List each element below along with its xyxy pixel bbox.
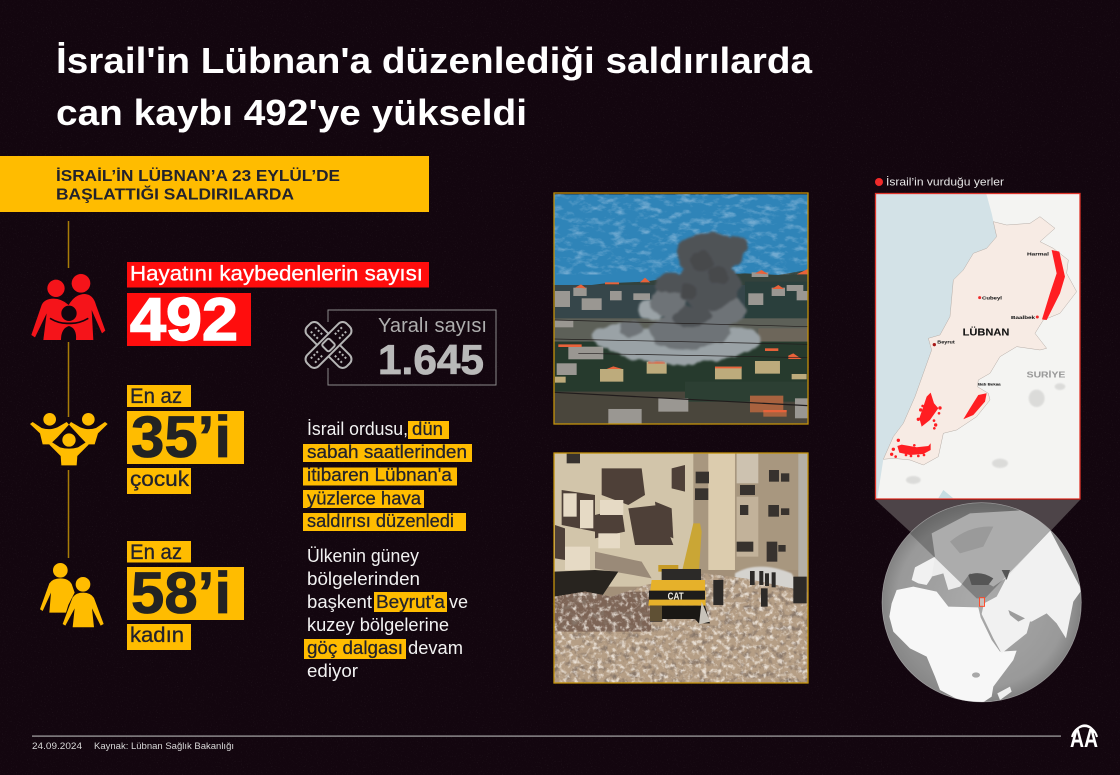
place labels: Baalbek (1011, 315, 1036, 320)
text block: migration: ediyor (307, 661, 358, 681)
place labels: Batı Bekaa (978, 383, 1002, 387)
stat: children: çocuk (130, 468, 190, 491)
photo: rubble and excavator (554, 453, 808, 685)
stat: children (127, 385, 244, 494)
place labels: Beyrut (937, 340, 955, 345)
stat: women: kadın (130, 624, 184, 647)
Iberia and France (912, 557, 935, 585)
timeline connector (68, 221, 70, 558)
strikes: Hermel (1042, 250, 1065, 320)
text block: army statement: sabah saatlerinden (307, 442, 467, 462)
place labels: LÜBNAN (963, 327, 1009, 338)
panel: wounded (289, 305, 496, 385)
footer: date and source (32, 741, 234, 752)
icon: yellow women (40, 563, 104, 627)
footer: date and source: 24.09.2024 (32, 741, 82, 752)
text block: migration: kuzey bölgelerine (307, 615, 449, 635)
text block: army statement (303, 419, 472, 531)
text block: migration: bölgelerinden (307, 569, 420, 589)
text block: army statement: yüzlerce hava (307, 488, 422, 508)
text block: migration: devam (408, 638, 463, 658)
stat: women: 58’i (131, 561, 231, 626)
location marker (979, 598, 984, 606)
banner: subtitle (0, 156, 429, 212)
title: can kaybı 492'ye yükseldi (56, 92, 527, 133)
icon: yellow children (30, 413, 108, 465)
text block: army statement: itibaren Lübnan'a (307, 465, 453, 485)
stat: women (127, 541, 244, 650)
strikes: Nabatieh (919, 393, 938, 427)
footer rule (32, 736, 1061, 737)
globe (876, 500, 1082, 703)
text block: army statement: dün (412, 419, 443, 439)
photo frame: rubble (554, 453, 808, 683)
text block: migration: Beyrut'a (376, 592, 446, 612)
number: deaths 492: 492 (130, 286, 238, 353)
place labels (937, 252, 1066, 387)
icon: red family (31, 274, 105, 340)
text block: army statement: İsrail ordusu, (307, 419, 408, 439)
photo: rubble and excavator: CAT (668, 591, 684, 602)
stat: children: En az (130, 385, 182, 408)
Europe and Russia (928, 510, 1050, 590)
place labels: Cubeyl (982, 296, 1002, 301)
text block: migration: Ülkenin güney (307, 546, 419, 566)
text block: migration (304, 546, 468, 681)
title (56, 40, 813, 133)
strikes: Bekaa (963, 393, 987, 419)
stat: children: 35’i (131, 405, 231, 470)
place labels: SURİYE (1027, 370, 1066, 380)
footer: date and source: Kaynak: Lübnan Sağlık Bakanlığı (94, 741, 234, 752)
text block: army statement: saldırısı düzenledi (307, 511, 454, 531)
text block: migration: ve (449, 592, 468, 612)
place markers (978, 296, 981, 299)
icon: bandage (289, 305, 368, 385)
zoom cone over globe (910, 503, 1050, 598)
title: İsrail'in Lübnan'a düzenlediği saldırılarda (56, 40, 813, 81)
panel: wounded: 1.645 (378, 336, 484, 383)
zoom cone behind globe (876, 500, 1080, 532)
banner: subtitle: BAŞLATTIĞI SALDIRILARDA (56, 186, 294, 204)
panel: wounded: Yaralı sayısı (378, 314, 487, 337)
logo: AA: AA (1070, 723, 1098, 753)
map frame (876, 194, 1080, 499)
photo frame: smoke (554, 193, 808, 424)
photo: smoke over town (554, 194, 808, 424)
legend: strike locations: İsrail’in vurduğu yerler (886, 176, 1004, 188)
map: Lebanon (875, 193, 1081, 500)
stat: women: En az (130, 541, 182, 564)
Asia (982, 530, 1082, 653)
globe locator (876, 500, 1082, 703)
banner: subtitle: İSRAİL’İN LÜBNAN’A 23 EYLÜL’DE (56, 168, 340, 185)
text block: migration: göç dalgası (307, 638, 403, 658)
label: deaths: Hayatını kaybedenlerin sayısı (130, 262, 423, 286)
strikes: South border (897, 443, 931, 455)
place labels: Harmal (1027, 252, 1049, 257)
text block: migration: başkent (307, 592, 372, 612)
